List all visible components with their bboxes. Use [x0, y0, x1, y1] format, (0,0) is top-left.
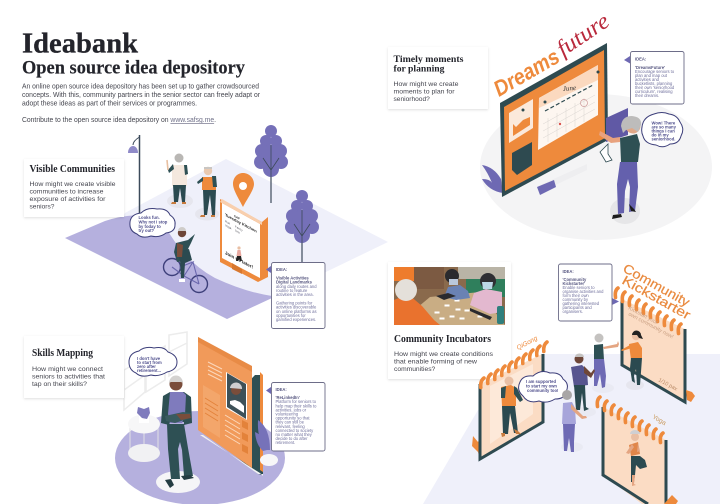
speech bubble: wow: seniorhood. — [652, 136, 675, 142]
booth small text: 1/10 pax — [657, 377, 678, 393]
man with arms crossed — [156, 376, 200, 493]
idea box: ReLinkedIn: volunteering — [276, 412, 299, 416]
speech bubble: wow: Wow! There — [652, 120, 676, 126]
plant — [482, 165, 503, 193]
question text — [394, 81, 459, 103]
idea box: ReLinkedIn: activities, jobs or — [276, 407, 307, 412]
person: man greeting — [195, 167, 219, 220]
idea box: dreams future: their own 'seniorhood — [635, 85, 675, 90]
intro text: An online open source idea depository has been set up to gather crowdsourced — [22, 84, 259, 90]
speech bubble: zero — [129, 347, 177, 376]
question text: seniors to activities that — [32, 374, 105, 380]
idea box: visible activities — [266, 262, 325, 328]
question text — [30, 181, 116, 210]
question text: that enable forming of new — [394, 358, 477, 366]
plant — [255, 420, 278, 466]
intro text — [22, 84, 261, 124]
path — [65, 216, 272, 319]
light plaza: visible communities — [95, 159, 388, 319]
idea box: ReLinkedIn: help map their skills to — [276, 403, 317, 408]
pocket — [512, 142, 532, 175]
idea box: dreams future: plan and map out — [635, 73, 668, 78]
sign text: Join us later! — [225, 250, 253, 271]
heading: Skills Mapping — [32, 348, 93, 359]
idea box: visible activities: gamified experiences. — [276, 317, 316, 322]
idea box: community kickstarter: organise activities and — [562, 289, 604, 294]
speech bubble: wow: are so many — [652, 124, 677, 130]
floor circle — [115, 411, 285, 504]
future title: future — [552, 8, 614, 61]
idea box: visible activities: activities in the area. — [276, 292, 314, 297]
idea box: visible activities: Gathering points for — [276, 300, 313, 306]
intro text: Contribute to the open source idea depository on www.safsg.me. — [22, 117, 216, 124]
speech bubble: wow: things I can — [652, 128, 675, 134]
light plaza: community incubators — [423, 354, 720, 504]
sign text: Kitchen — [242, 221, 257, 234]
idea box: dreams future: bucketlists, planning — [635, 81, 673, 86]
idea box: community kickstarter: gathering interested — [562, 301, 600, 306]
booth: community kickstarter — [615, 261, 695, 402]
intro text: adopt these ideas as part of their services or programmes. — [22, 100, 197, 108]
side table with plant — [128, 407, 160, 462]
woman at the board — [599, 108, 641, 224]
idea box: visible activities: on online platforms as — [276, 309, 317, 314]
speech bubble: looks fun: by today to — [138, 224, 161, 229]
person: woman with raised arm — [592, 334, 619, 393]
idea box: community kickstarter: Enable seniors to — [562, 285, 595, 290]
idea box: ReLinkedIn: retirement. — [276, 440, 295, 445]
calendar: June — [562, 84, 576, 93]
idea box: visible activities: activities discoverable — [276, 305, 317, 310]
illustration: visible communities street — [65, 125, 319, 319]
heading — [394, 54, 464, 74]
speech bubble: zero: to start from — [137, 360, 162, 365]
question text — [394, 351, 494, 373]
idea box: community kickstarter: form their own — [562, 293, 589, 298]
question text: How might we connect — [32, 366, 103, 373]
question text — [32, 366, 105, 388]
question text: moments to plan for — [394, 88, 455, 96]
booth: yoga: Yoga — [651, 414, 667, 427]
subtitle: Open source idea depository — [22, 58, 246, 78]
tree — [285, 190, 319, 262]
idea box: visible activities: along daily routes and — [276, 284, 317, 289]
idea box: visible activities: routine to feature — [276, 288, 308, 293]
booth: yoga — [597, 397, 678, 504]
speech bubble: supported — [519, 372, 567, 402]
tree — [254, 125, 288, 203]
photo — [509, 99, 533, 143]
question text: tap on their skills? — [32, 381, 87, 388]
idea box: community kickstarter: community by — [562, 297, 589, 302]
heading: for planning — [394, 64, 445, 74]
idea box: dreams future: 'DreamsFuture' — [635, 65, 665, 70]
kickstarter heading: Community — [621, 261, 693, 310]
icon: location pin — [233, 173, 254, 207]
booth small text: Kickstart your — [627, 305, 659, 326]
idea box: ReLinkedIn: decide to do after — [276, 436, 308, 441]
board frame — [500, 43, 608, 197]
person: woman greeting — [167, 154, 193, 208]
idea box: dreams future: Encourage seniors to — [635, 69, 675, 74]
question text: How might we create — [394, 81, 459, 88]
idea box: dreams future: activities and — [635, 77, 660, 82]
idea box: community kickstarter: Kickstarter' — [562, 281, 585, 286]
idea box: ReLinkedIn: opportunity so that — [276, 416, 310, 421]
question text: communities to increase — [30, 188, 104, 196]
illustration: dreams future board — [482, 8, 614, 197]
sign text: Yoga — [225, 223, 232, 230]
question text: exposure of activities for — [30, 196, 106, 203]
panel: skills mapping — [24, 336, 124, 398]
booth: qigong — [472, 335, 547, 460]
sign text: Run — [225, 219, 230, 226]
idea box: visible activities: opportunities for — [276, 313, 306, 318]
speech bubble: zero: zero after — [137, 364, 156, 369]
window outlines — [124, 332, 187, 410]
intro text: concepts. With this, community partners in the senior sector can freely adapt or — [22, 92, 261, 99]
panel: community incubators — [388, 262, 511, 379]
idea box: community kickstarter: organisers. — [562, 309, 583, 314]
idea box: ReLinkedIn: no matter what they — [276, 432, 313, 437]
idea box: visible activities: Digital Landmarks — [276, 280, 313, 285]
panel: visible communities — [24, 159, 124, 217]
speech bubble: zero: I don't have — [137, 356, 161, 361]
idea box: visible activities: IDEA: — [276, 267, 287, 272]
question text: seniorhood? — [394, 96, 430, 103]
sign text: Fancy — [235, 224, 243, 233]
idea box: ReLinkedIn — [266, 382, 325, 451]
speech bubble: supported: I am supported — [526, 379, 556, 384]
question text: How might we create conditions — [394, 351, 494, 358]
idea box: dreams future: their dreams. — [635, 93, 659, 98]
speech bubble: looks fun: try out? — [138, 228, 155, 233]
person in booth — [501, 376, 523, 437]
idea box: ReLinkedIn: IDEA: — [276, 387, 287, 392]
speech bubble: supported: to start my own — [526, 384, 557, 388]
booth: qigong: QiGong — [516, 335, 539, 352]
speech bubble: wow: do in my — [652, 132, 669, 138]
idea box: dreams future: IDEA: — [635, 56, 646, 62]
panel: timely moments — [388, 47, 488, 109]
speech bubble: looks fun: Looks fun. — [138, 215, 160, 220]
speech bubble: supported: community too! — [527, 388, 558, 393]
idea box: community kickstarter: participants and — [562, 305, 592, 310]
idea box: dreams future — [624, 52, 684, 104]
kickstarter heading — [620, 261, 694, 323]
tablet board — [198, 337, 263, 476]
booth small text — [627, 305, 678, 393]
speech bubble: zero: retirement... — [137, 368, 161, 373]
question text: How might we create visible — [30, 181, 116, 188]
group of seniors chatting — [561, 334, 619, 452]
grey floor ellipse: dreams scene — [480, 94, 712, 240]
idea box: ReLinkedIn: they can still be — [276, 420, 305, 425]
calendar — [538, 65, 600, 150]
sign board — [220, 199, 268, 282]
idea box: ReLinkedIn: connected to society — [276, 428, 314, 433]
marker — [537, 164, 587, 195]
idea box: ReLinkedIn: Platform for seniors to — [276, 399, 317, 404]
speech bubble: looks fun: Why not I stop — [138, 220, 168, 224]
dreams title: Dreams — [489, 44, 564, 101]
idea box: community kickstarter: IDEA: — [562, 269, 574, 274]
question text: seniors? — [30, 204, 55, 210]
lamp post — [128, 135, 140, 215]
board surface — [504, 50, 605, 191]
question text: communities? — [394, 366, 436, 373]
speech bubble: wow — [642, 112, 683, 147]
illustration: skills mapping scene — [115, 332, 285, 504]
heading: Visible Communities — [30, 164, 115, 175]
cyclist — [164, 227, 208, 292]
person: man in blue — [571, 354, 596, 417]
sign text: Tea — [235, 228, 240, 235]
idea box: dreams future: curriculum', realising — [635, 89, 673, 94]
booth small text: own community now! — [627, 311, 675, 341]
idea box: community kickstarter — [558, 264, 619, 321]
person: yoga pose — [626, 430, 647, 486]
idea box: ReLinkedIn: 'ReLinkedIn' — [276, 395, 300, 400]
sign text: Tuesday — [225, 212, 241, 226]
title: Ideabank — [22, 28, 139, 60]
sign text — [225, 209, 257, 273]
idea box: visible activities: Visible Activities — [276, 276, 309, 280]
heading: Community Incubators — [394, 334, 491, 345]
idea box: ReLinkedIn: relevant, feeling — [276, 424, 305, 429]
sign text: SAF — [234, 214, 240, 221]
person: host — [621, 330, 644, 390]
kickstarter heading: Kickstarter — [620, 273, 694, 323]
photo: seniors playing a card game — [394, 267, 505, 325]
heading: Timely moments — [394, 54, 464, 65]
idea box: community kickstarter: 'Community — [562, 277, 587, 282]
speech bubble: looks fun — [130, 208, 175, 237]
person: woman gesturing — [561, 390, 587, 452]
